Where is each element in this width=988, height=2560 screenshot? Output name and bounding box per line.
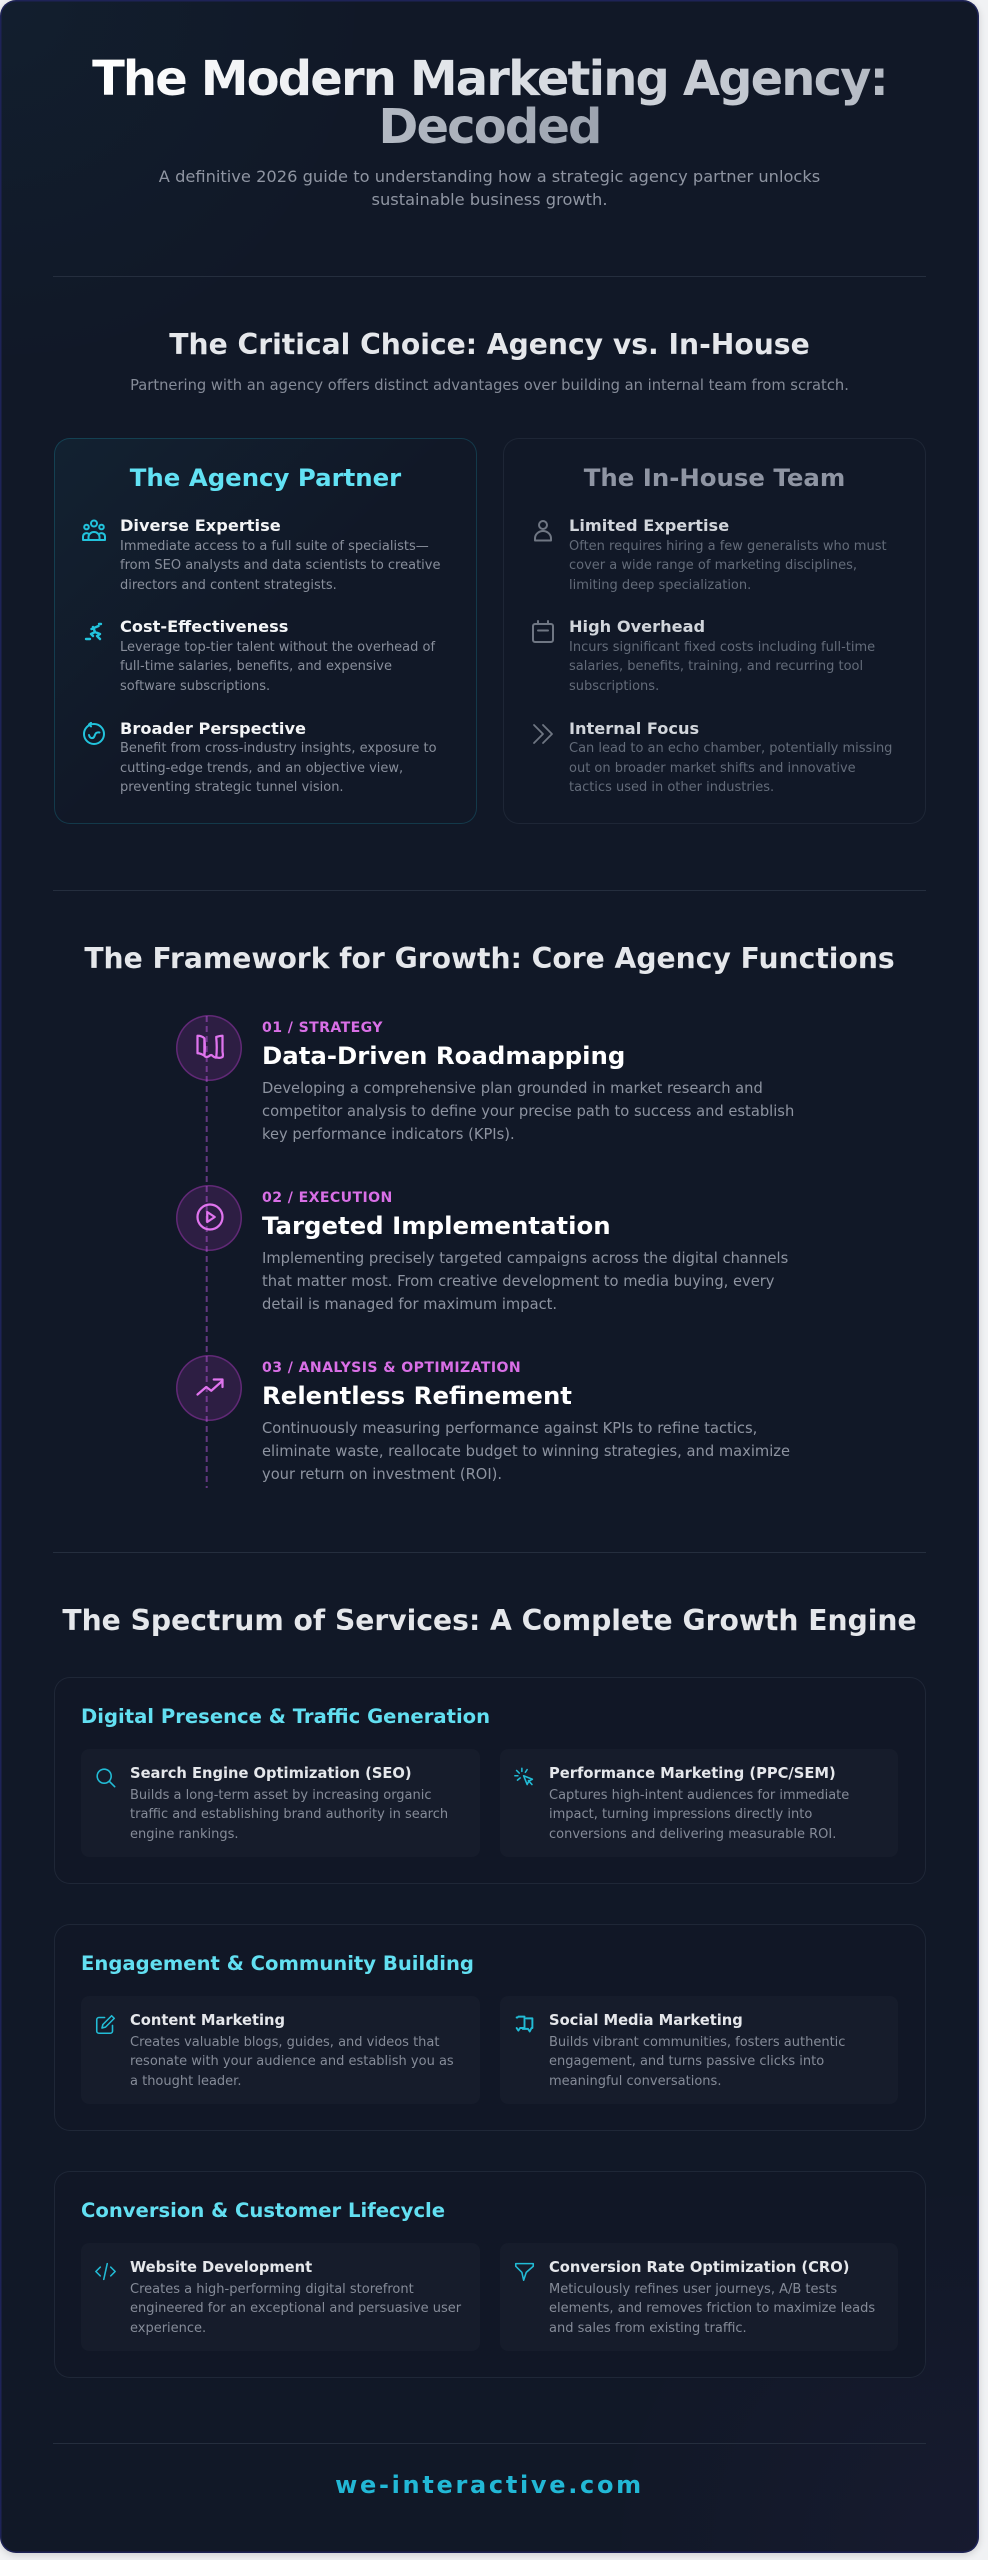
title: The Modern Marketing Agency: xyxy=(92,51,887,107)
item: high overhead xyxy=(532,617,875,694)
service: website development xyxy=(81,2243,480,2351)
panel: engagement and community building xyxy=(54,1924,926,2131)
item: limited expertise xyxy=(534,516,887,592)
item: limited expertise: Limited Expertise xyxy=(569,516,729,535)
item: cost-effectiveness: Cost-Effectiveness xyxy=(120,617,288,636)
icon: calendar xyxy=(532,620,554,643)
step: analysis and optimization xyxy=(176,1355,790,1482)
service: website development: Website Development xyxy=(130,2259,312,2276)
panel: the in-house team xyxy=(503,438,926,824)
panel: conversion and customer lifecycle xyxy=(54,2171,926,2378)
step description: key performance indicators (KPIs). xyxy=(262,1126,515,1142)
item: broader perspective xyxy=(83,719,437,795)
service: performance marketing: conversions and delivering measurable ROI. xyxy=(549,1826,836,1842)
service: seo: engine rankings. xyxy=(130,1826,239,1842)
item: cost-effectiveness: full-time salaries, benefits, and expensive xyxy=(120,659,392,674)
service: cro: Conversion Rate Optimization (CRO) xyxy=(549,2259,849,2276)
agency heading: The Agency Partner xyxy=(130,463,401,492)
subtitle xyxy=(159,167,820,209)
service: seo xyxy=(81,1749,480,1857)
group heading: Digital Presence & Traffic Generation xyxy=(81,1705,490,1728)
item: diverse expertise: Diverse Expertise xyxy=(120,516,281,535)
service: social media xyxy=(500,1996,898,2104)
service: content marketing: a thought leader. xyxy=(130,2074,241,2088)
icon: circular perspective xyxy=(83,722,105,745)
step description: Developing a comprehensive plan grounded in market research and xyxy=(262,1080,763,1096)
service: content marketing xyxy=(81,1996,480,2104)
group heading: Engagement & Community Building xyxy=(81,1952,474,1975)
subtitle: sustainable business growth. xyxy=(371,190,608,209)
icon: chat bubbles xyxy=(516,2016,534,2032)
service: seo: Search Engine Optimization (SEO) xyxy=(130,1765,412,1782)
service: social media: Social Media Marketing xyxy=(549,2012,743,2029)
service: performance marketing: Performance Marketing (PPC/SEM) xyxy=(549,1765,836,1782)
step label: 03 / ANALYSIS & OPTIMIZATION xyxy=(262,1360,521,1376)
panel: digital presence and traffic generation xyxy=(54,1677,926,1884)
item: high overhead: Incurs significant fixed costs including full-time xyxy=(569,640,875,655)
step description: Implementing precisely targeted campaigns across the digital channels xyxy=(262,1250,788,1266)
step circle xyxy=(176,1015,242,1081)
heading: the critical choice: The Critical Choice: Agency vs. In-House xyxy=(169,328,810,361)
item: broader perspective: preventing strategic tunnel vision. xyxy=(120,780,344,795)
icon: lean runner xyxy=(84,622,102,640)
step description xyxy=(262,1080,794,1142)
subtitle: A definitive 2026 guide to understanding how a strategic agency partner unlocks xyxy=(159,167,820,186)
service: website development: Creates a high-performing digital storefront xyxy=(130,2282,414,2296)
step title: Data-Driven Roadmapping xyxy=(262,1040,625,1070)
panel: the agency partner xyxy=(54,438,477,824)
step description: eliminate waste, reallocate budget to winning strategies, and maximize xyxy=(262,1442,790,1460)
icon: code xyxy=(95,2262,116,2280)
item: internal focus: out on broader market shifts and innovative xyxy=(569,761,856,776)
service: social media: Builds vibrant communities, fosters authentic xyxy=(549,2034,845,2050)
item: cost-effectiveness xyxy=(84,617,436,694)
item: high overhead: High Overhead xyxy=(569,617,705,636)
item: internal focus: Can lead to an echo chamber, potentially missing xyxy=(569,741,892,756)
section intro text: Partnering with an agency offers distinct advantages over building an internal team from scratch. xyxy=(130,377,849,394)
item: high overhead: subscriptions. xyxy=(569,679,659,694)
service: seo: Builds a long-term asset by increasing organic xyxy=(130,1788,432,1802)
service: cro: elements, and removes friction to maximize leads xyxy=(549,2301,875,2316)
icon: funnel xyxy=(514,2262,534,2281)
step label: 02 / EXECUTION xyxy=(262,1190,393,1206)
footer website: we-interactive.com xyxy=(335,2471,644,2499)
service: content marketing: Content Marketing xyxy=(130,2012,285,2029)
icon: search xyxy=(96,1768,116,1788)
item: diverse expertise: directors and content strategists. xyxy=(120,578,337,592)
step description xyxy=(262,1250,788,1312)
service: cro xyxy=(500,2243,898,2351)
icon: play circle xyxy=(196,1203,224,1231)
service: website development: engineered for an exceptional and persuasive user xyxy=(130,2301,461,2316)
service: seo: traffic and establishing brand authority in search xyxy=(130,1807,448,1822)
step: strategy xyxy=(176,1015,794,1142)
service: content marketing: resonate with your audience and establish you as xyxy=(130,2054,454,2069)
service: social media: engagement, and turns passive clicks into xyxy=(549,2054,824,2069)
item: limited expertise: cover a wide range of marketing disciplines, xyxy=(569,558,857,573)
icon: pencil square xyxy=(96,2014,115,2034)
item: internal focus: Internal Focus xyxy=(569,719,699,738)
title: Decoded xyxy=(378,99,600,155)
item: high overhead: salaries, benefits, training, and recurring tool xyxy=(569,659,863,674)
service: cro: Meticulously refines user journeys, A/B tests xyxy=(549,2282,837,2296)
item: broader perspective: Benefit from cross-industry insights, exposure to xyxy=(120,741,437,756)
step circle xyxy=(176,1185,242,1251)
group heading: Conversion & Customer Lifecycle xyxy=(81,2199,445,2222)
step description: that matter most. From creative development to media buying, every xyxy=(262,1272,774,1290)
service: website development: experience. xyxy=(130,2320,206,2336)
step description xyxy=(262,1420,790,1482)
item: diverse expertise: from SEO analysts and data scientists to creative xyxy=(120,558,440,573)
heading: spectrum of services: The Spectrum of Services: A Complete Growth Engine xyxy=(62,1604,917,1637)
item: broader perspective: Broader Perspective xyxy=(120,719,306,738)
item: cost-effectiveness: software subscriptions. xyxy=(120,679,270,694)
service: performance marketing: Captures high-intent audiences for immediate xyxy=(549,1788,849,1802)
step: execution xyxy=(176,1185,788,1312)
item: internal focus xyxy=(533,719,892,795)
service: performance marketing xyxy=(500,1749,898,1857)
service: cro: and sales from existing traffic. xyxy=(549,2320,747,2336)
step title: Targeted Implementation xyxy=(262,1210,611,1240)
icon: trending up xyxy=(196,1378,224,1396)
service: content marketing: Creates valuable blogs, guides, and videos that xyxy=(130,2034,439,2050)
icon: cursor click xyxy=(514,1768,534,1786)
icon: double chevron xyxy=(533,724,553,744)
step description: competitor analysis to define your precise path to success and establish xyxy=(262,1102,794,1120)
item: broader perspective: cutting-edge trends, and an objective view, xyxy=(120,761,403,776)
item: limited expertise: limiting deep specialization. xyxy=(569,578,751,592)
item: internal focus: tactics used in other industries. xyxy=(569,780,774,795)
item: diverse expertise xyxy=(82,516,440,592)
heading: framework for growth: The Framework for Growth: Core Agency Functions xyxy=(84,942,895,975)
timeline dashed line xyxy=(206,1016,208,1488)
service: social media: meaningful conversations. xyxy=(549,2074,721,2088)
icon: single person xyxy=(534,520,552,542)
step title: Relentless Refinement xyxy=(262,1380,572,1410)
icon: team xyxy=(82,520,106,541)
step circle xyxy=(176,1355,242,1421)
item: limited expertise: Often requires hiring a few generalists who must xyxy=(569,538,887,554)
item: diverse expertise: Immediate access to a full suite of specialists— xyxy=(120,538,429,554)
in-house heading: The In-House Team xyxy=(584,463,845,492)
step description: detail is managed for maximum impact. xyxy=(262,1296,557,1312)
step label: 01 / STRATEGY xyxy=(262,1020,383,1036)
icon: open map xyxy=(196,1034,224,1059)
service: performance marketing: impact, turning impressions directly into xyxy=(549,1807,812,1822)
item: cost-effectiveness: Leverage top-tier talent without the overhead of xyxy=(120,640,435,655)
step description: Continuously measuring performance against KPIs to refine tactics, xyxy=(262,1420,757,1436)
step description: your return on investment (ROI). xyxy=(262,1466,502,1482)
title xyxy=(92,51,887,155)
